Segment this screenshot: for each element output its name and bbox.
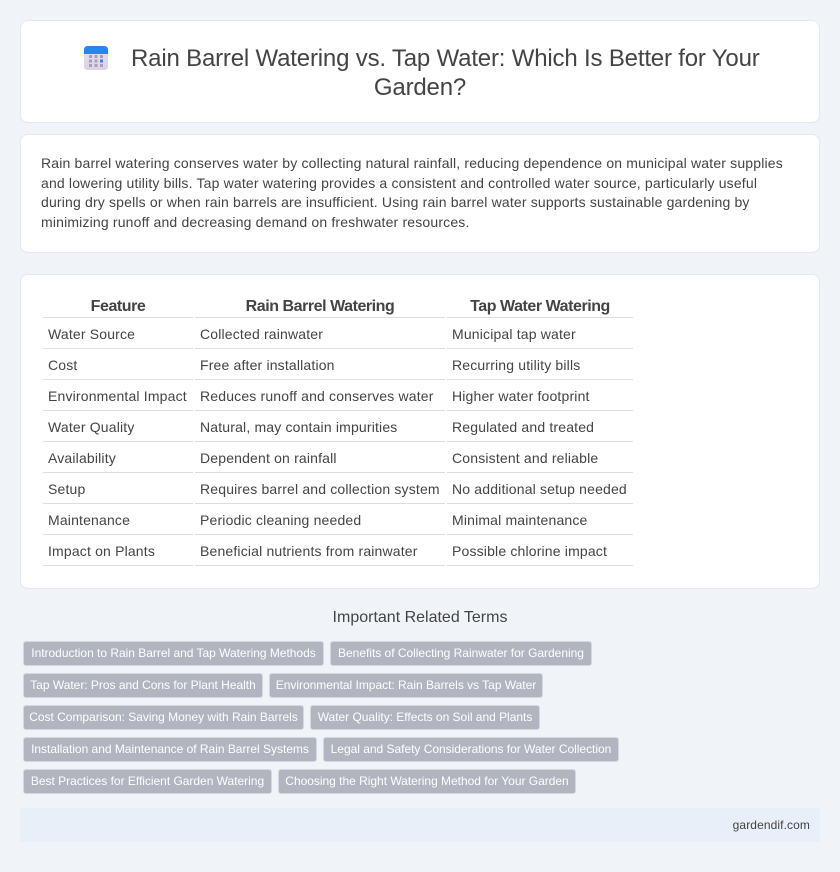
row: Impact on Plants: Impact on Plants bbox=[48, 543, 155, 559]
footer text: gardendif.com bbox=[733, 818, 810, 832]
row: Availability: Consistent and reliable bbox=[452, 450, 598, 466]
description text: minimizing runoff and decreasing demand on freshwater resources. bbox=[41, 214, 470, 230]
title bbox=[131, 45, 760, 101]
row: Availability: Availability bbox=[48, 450, 116, 466]
tag bbox=[310, 705, 540, 730]
tag bbox=[23, 673, 263, 698]
icon: calendar bbox=[84, 46, 108, 70]
tag: Choosing the Right Watering Method for Your Garden bbox=[285, 774, 569, 788]
row: Cost: Free after installation bbox=[200, 357, 335, 373]
tag: Legal and Safety Considerations for Water Collection bbox=[331, 742, 611, 756]
description text: during dry spells or when rain barrels are insufficient. Using rain barrel water supports sustainable gardening by bbox=[41, 194, 750, 210]
row: Cost: Recurring utility bills bbox=[452, 357, 580, 373]
row: Maintenance: Maintenance bbox=[48, 512, 130, 528]
related term tags bbox=[23, 641, 619, 794]
tag: Cost Comparison: Saving Money with Rain Barrels bbox=[29, 710, 298, 724]
row: Impact on Plants: Possible chlorine impact bbox=[452, 543, 607, 559]
row: Maintenance: Periodic cleaning needed bbox=[200, 512, 361, 528]
description text: and lowering utility bills. Tap water watering provides a consistent and controlled water source, particularly useful bbox=[41, 174, 757, 190]
row: Water Source: Water Source bbox=[48, 326, 135, 342]
title: Garden? bbox=[374, 74, 466, 101]
column headers bbox=[91, 298, 610, 315]
row: Cost: Cost bbox=[48, 357, 77, 373]
tag bbox=[323, 737, 619, 762]
description text bbox=[41, 155, 783, 230]
row: Water Quality: Regulated and treated bbox=[452, 419, 594, 435]
title: Rain Barrel Watering vs. Tap Water: Which Is Better for Your bbox=[131, 45, 760, 72]
tag bbox=[23, 737, 317, 762]
row: Setup: No additional setup needed bbox=[452, 481, 627, 497]
tag: Benefits of Collecting Rainwater for Gardening bbox=[338, 646, 584, 660]
row: Setup: Requires barrel and collection system bbox=[200, 481, 440, 497]
tag bbox=[23, 705, 304, 730]
footer bar bbox=[20, 808, 820, 842]
tag: Installation and Maintenance of Rain Barrel Systems bbox=[31, 742, 309, 756]
tag: Tap Water: Pros and Cons for Plant Health bbox=[30, 678, 256, 692]
row: Maintenance: Minimal maintenance bbox=[452, 512, 588, 528]
row: Availability: Dependent on rainfall bbox=[200, 450, 337, 466]
related terms heading: Important Related Terms bbox=[333, 609, 507, 626]
tag: Introduction to Rain Barrel and Tap Watering Methods bbox=[31, 646, 316, 660]
row: Maintenance bbox=[48, 512, 588, 528]
tag bbox=[330, 641, 592, 666]
row: Setup bbox=[48, 481, 627, 497]
row: Impact on Plants: Beneficial nutrients from rainwater bbox=[200, 543, 418, 559]
column headers: Rain Barrel Watering bbox=[246, 298, 394, 315]
description card bbox=[20, 134, 820, 253]
row: Cost bbox=[48, 357, 580, 373]
row: Water Source bbox=[48, 326, 576, 342]
tag bbox=[23, 641, 324, 666]
row: Environmental Impact: Reduces runoff and conserves water bbox=[200, 388, 434, 404]
row: Water Quality: Natural, may contain impurities bbox=[200, 419, 397, 435]
tag: Environmental Impact: Rain Barrels vs Tap Water bbox=[276, 678, 536, 692]
tag: Water Quality: Effects on Soil and Plants bbox=[318, 710, 532, 724]
tag: Best Practices for Efficient Garden Watering bbox=[31, 774, 264, 788]
row: Water Source: Collected rainwater bbox=[200, 326, 323, 342]
row: Availability bbox=[48, 450, 598, 466]
row: Water Source: Municipal tap water bbox=[452, 326, 576, 342]
row: Environmental Impact: Environmental Impact bbox=[48, 388, 187, 404]
table card bbox=[20, 274, 820, 589]
tag bbox=[23, 769, 272, 794]
description text: Rain barrel watering conserves water by collecting natural rainfall, reducing dependence on municipal water supplies bbox=[41, 155, 783, 171]
tag bbox=[278, 769, 576, 794]
tag bbox=[269, 673, 543, 698]
row: Water Quality bbox=[48, 419, 594, 435]
header card bbox=[20, 20, 820, 123]
row: Water Quality: Water Quality bbox=[48, 419, 134, 435]
column headers: Feature bbox=[91, 298, 145, 315]
comparison table bbox=[43, 298, 633, 566]
column headers: Tap Water Watering bbox=[470, 298, 610, 315]
row: Impact on Plants bbox=[48, 543, 607, 559]
row: Environmental Impact bbox=[48, 388, 590, 404]
row: Setup: Setup bbox=[48, 481, 85, 497]
row: Environmental Impact: Higher water footprint bbox=[452, 388, 590, 404]
